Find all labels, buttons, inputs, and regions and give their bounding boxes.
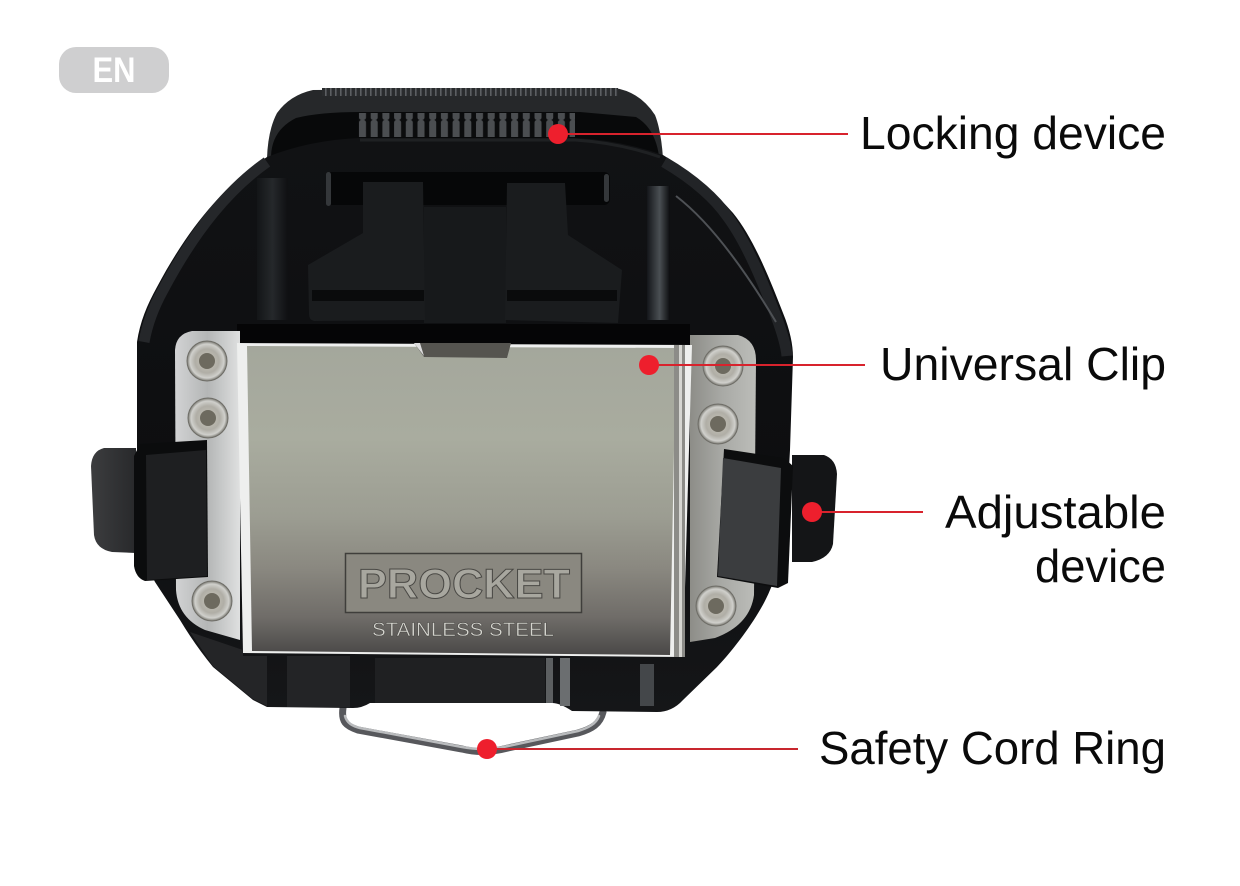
callout: Locking device: Locking device xyxy=(860,107,1166,159)
right slider block xyxy=(717,449,793,588)
dark recess above plate xyxy=(237,324,690,348)
stainless steel clip plate xyxy=(237,343,692,657)
callout: Adjustable device: Adjustable xyxy=(945,486,1166,538)
callout: Safety Cord Ring: Safety Cord Ring xyxy=(819,722,1166,774)
main black body xyxy=(137,138,793,712)
body rim highlight xyxy=(144,140,787,356)
callout: Universal Clip: Universal Clip xyxy=(880,338,1166,390)
left slider block xyxy=(134,440,208,581)
safety cord ring xyxy=(343,708,603,752)
right adjustable tab xyxy=(792,455,837,562)
stainless steel text: STAINLESS STEEL xyxy=(372,620,554,641)
callout: Adjustable device: device xyxy=(1035,540,1166,592)
language badge: EN xyxy=(59,47,169,93)
callout: Safety Cord Ring xyxy=(477,722,1166,774)
lower body panels xyxy=(190,632,654,707)
language badge: EN: EN xyxy=(92,51,136,90)
embossed logo box: PROCKET xyxy=(358,560,570,607)
left adjustable tab xyxy=(91,448,136,553)
screws xyxy=(187,341,743,626)
latch shadow bands xyxy=(312,290,617,301)
top housing with ribbed rim xyxy=(267,88,663,158)
callout: Adjustable device xyxy=(802,486,1166,592)
callout: Locking device xyxy=(548,107,1166,159)
left side plate xyxy=(175,331,240,640)
moulded pillars xyxy=(257,178,670,320)
right side plate xyxy=(690,335,756,642)
left latch xyxy=(308,182,425,321)
callout: Universal Clip xyxy=(639,338,1166,390)
product photo: belt clip device xyxy=(91,88,837,752)
centre panel and hinge xyxy=(326,172,610,323)
embossed logo box xyxy=(346,554,582,612)
right latch xyxy=(505,183,622,323)
